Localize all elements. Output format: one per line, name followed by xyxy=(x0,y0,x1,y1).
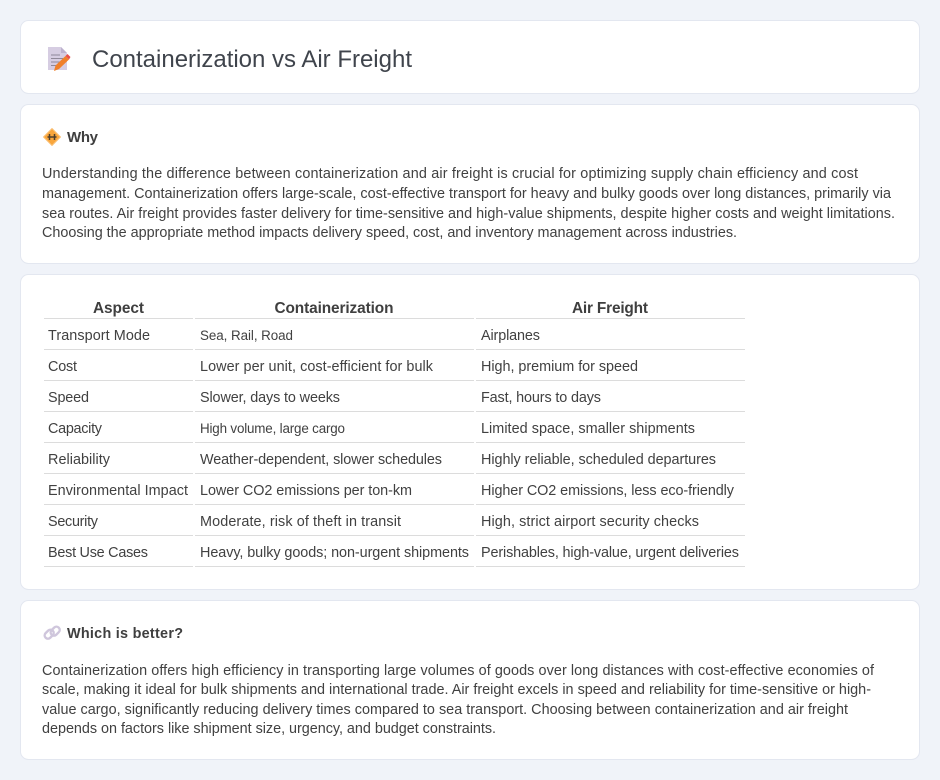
table header: Air Freight xyxy=(572,300,648,317)
icon: warning diamond xyxy=(44,128,60,146)
row: cost: Lower per unit, cost-efficient for bulk xyxy=(200,359,434,375)
row: security: Moderate, risk of theft in transit xyxy=(200,514,401,530)
text block: which paragraph: depends on factors like shipment size, urgency, and budget constraints. xyxy=(42,721,496,737)
row: speed xyxy=(48,390,601,406)
row: reliability xyxy=(48,452,716,468)
row: environmental impact: Lower CO2 emissions per ton-km xyxy=(200,483,412,499)
table header: Containerization xyxy=(274,300,394,317)
row: security: High, strict airport security checks xyxy=(481,514,699,530)
panel: title header xyxy=(20,20,920,94)
row: environmental impact xyxy=(48,483,735,499)
row: speed: Speed xyxy=(48,390,89,406)
row: best use cases: Perishables, high-value, urgent deliveries xyxy=(481,545,739,561)
table header: Aspect xyxy=(93,300,144,317)
row: best use cases: Best Use Cases xyxy=(48,545,148,561)
row: security xyxy=(48,514,699,530)
text block: which paragraph: value cargo, significantly reducing delivery times compared to sea transport. Choosing between containerization and air freight xyxy=(42,702,848,718)
row: capacity: Limited space, smaller shipments xyxy=(481,421,695,437)
panel: which is better xyxy=(20,600,920,760)
text block: why paragraph: management. Containerization offers large-scale, cost-effective transport for heavy and bulky goods over long distances, primarily via xyxy=(42,186,891,202)
text block: why paragraph xyxy=(42,166,895,241)
row: best use cases xyxy=(48,545,739,561)
row: reliability: Reliability xyxy=(48,452,111,468)
text block: why paragraph: Understanding the difference between containerization and air freight is crucial for optimizing supply chain efficiency and cost xyxy=(42,166,858,182)
text block: which paragraph xyxy=(42,663,875,737)
row: best use cases: Heavy, bulky goods; non-urgent shipments xyxy=(200,545,469,561)
row: reliability: Weather-dependent, slower schedules xyxy=(200,452,442,468)
row: capacity: Capacity xyxy=(48,421,103,437)
row: capacity xyxy=(48,421,695,437)
heading: which is better: Which is better? xyxy=(67,626,183,642)
row: environmental impact: Higher CO2 emissions, less eco-friendly xyxy=(481,483,735,499)
panel: why xyxy=(20,104,920,264)
row: transport mode: Airplanes xyxy=(481,328,540,344)
row: transport mode xyxy=(48,328,540,344)
row: reliability: Highly reliable, scheduled departures xyxy=(481,452,716,468)
row: speed: Fast, hours to days xyxy=(481,390,601,406)
heading: why: Why xyxy=(67,129,99,146)
row: transport mode: Transport Mode xyxy=(48,328,150,344)
text block: why paragraph: Choosing the appropriate method impacts delivery speed, cost, and inventory management across industries. xyxy=(42,225,737,241)
text block: which paragraph: scale, making it ideal for bulk shipments and international trade. Air freight excels in speed and reliability for time-sensitive or high- xyxy=(42,682,871,698)
panel: comparison table xyxy=(20,274,920,590)
row: cost xyxy=(48,359,638,375)
row: transport mode: Sea, Rail, Road xyxy=(200,328,293,343)
row: speed: Slower, days to weeks xyxy=(200,390,340,406)
text block: which paragraph: Containerization offers high efficiency in transporting large volumes of goods over long distances with cost-effective economies of xyxy=(42,663,875,679)
title: Containerization vs Air Freight xyxy=(92,46,412,73)
table header xyxy=(93,300,648,317)
text block: why paragraph: sea routes. Air freight provides faster delivery for time-sensitive and high-value shipments, despite higher costs and weight limitations. xyxy=(42,206,895,222)
row: cost: High, premium for speed xyxy=(481,359,638,375)
row: environmental impact: Environmental Impact xyxy=(48,483,188,499)
row: cost: Cost xyxy=(48,359,77,375)
row: security: Security xyxy=(48,514,99,530)
row: capacity: High volume, large cargo xyxy=(200,421,345,436)
icon: chain link xyxy=(43,625,61,640)
icon: document with pencil xyxy=(48,47,70,71)
